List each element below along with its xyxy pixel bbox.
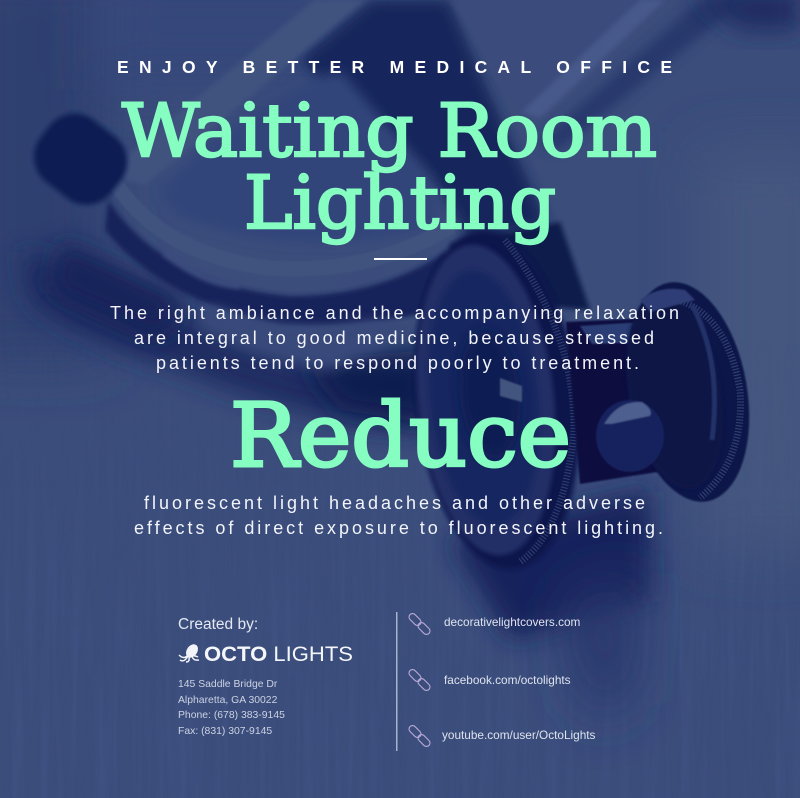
reduce paragraph: [134, 493, 663, 538]
link text 1: decorativelightcovers.com: [444, 615, 581, 629]
address block: [178, 679, 285, 737]
small reflection: [500, 378, 522, 402]
link text 2: facebook.com/octolights: [444, 673, 571, 687]
inner area of U: [160, 70, 440, 243]
reduce heading: Reduce: [230, 384, 571, 487]
dark tube: [105, 200, 470, 326]
icon: link 2: [408, 668, 431, 692]
intro paragraph: are integral to good medicine, because stressed: [134, 328, 654, 348]
clip behind chest piece: [450, 222, 590, 310]
top right corner dark: [690, 0, 800, 30]
light curve of tube: [112, 178, 452, 269]
large chest piece: [399, 222, 595, 578]
small chest piece: [611, 272, 765, 512]
dark wedge top centre: [300, 0, 548, 240]
tube highlight spots: [165, 252, 385, 285]
icon: octopus: [179, 643, 199, 662]
lighter wedge top: [452, 0, 640, 112]
address block: Phone: (678) 383-9145: [178, 710, 285, 721]
chrome knob: [596, 400, 664, 472]
created by label: Created by:: [178, 616, 258, 633]
main title: [122, 89, 657, 246]
dark line right of second arm: [535, 0, 745, 150]
knurled edge right side: [505, 240, 574, 562]
kicker heading: ENJOY BETTER MEDICAL OFFICE: [117, 57, 672, 77]
intro paragraph: The right ambiance and the accompanying relaxation: [110, 303, 679, 323]
bright second arm: [522, 0, 665, 118]
icon: link 1: [408, 612, 431, 636]
vertical divider: [396, 612, 398, 751]
reduce paragraph: effects of direct exposure to fluorescent lighting.: [134, 518, 663, 538]
logo: octo lights: [179, 643, 353, 666]
wordmark: OCTO LIGHTS: [204, 643, 353, 666]
address block: Alpharetta, GA 30022: [178, 695, 278, 706]
right tone: [700, 150, 800, 550]
reduce paragraph: fluorescent light headaches and other adverse: [144, 493, 645, 513]
second tube layer: [200, 305, 420, 370]
stem connecting pieces: [566, 318, 670, 484]
link text 3: youtube.com/user/OctoLights: [442, 728, 596, 742]
address block: 145 Saddle Bridge Dr: [178, 679, 278, 690]
main title: Waiting Room: [122, 89, 657, 174]
top left tone: [0, 0, 110, 360]
shadow beneath tube: [20, 250, 420, 430]
shadow beneath chest piece: [450, 490, 650, 640]
intro paragraph: patients tend to respond poorly to treatment.: [156, 353, 639, 373]
ear tip: [21, 101, 140, 218]
address block: Fax: (831) 307-9145: [178, 726, 272, 737]
intro paragraph: [110, 303, 679, 373]
light tube arm going up right: [118, 0, 365, 185]
main title: Lighting: [244, 161, 556, 246]
divider under title: [374, 258, 427, 260]
icon: link 3: [408, 724, 431, 748]
